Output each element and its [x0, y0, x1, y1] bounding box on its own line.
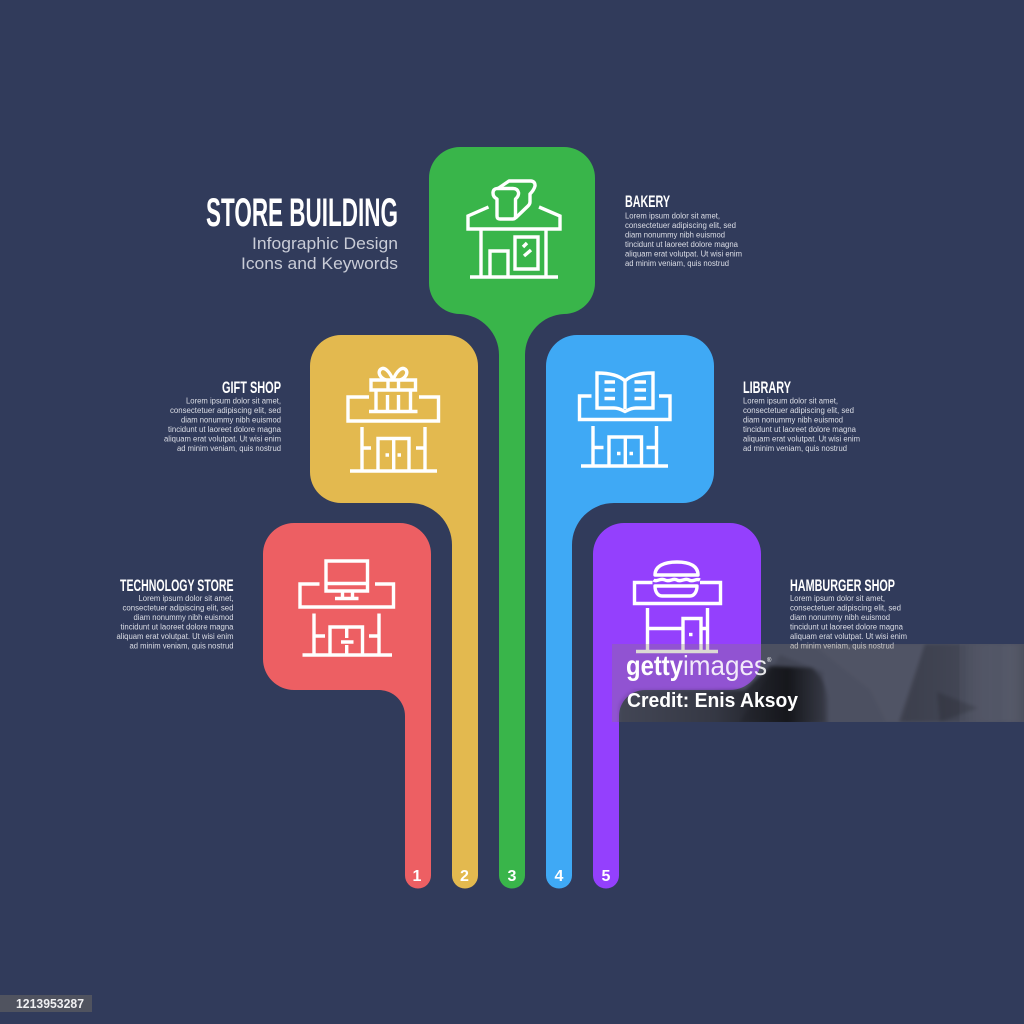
step numbers: 4 — [555, 868, 564, 885]
icon: technology store — [300, 561, 394, 655]
heading and text: technology store: Lorem ipsum dolor sit amet, — [138, 594, 234, 603]
heading and text: bakery — [625, 192, 742, 268]
icon: hamburger shop — [634, 562, 720, 652]
heading and text: hamburger shop: tincidunt ut laoreet dolore magna — [790, 622, 904, 632]
heading and text: hamburger shop: ad minim veniam, quis nostrud — [790, 642, 894, 650]
icon: bakery store — [468, 181, 560, 277]
heading and text: gift shop: consectetuer adipiscing elit, sed — [170, 406, 281, 415]
step numbers: 2 — [460, 868, 469, 885]
heading and text: bakery: BAKERY — [625, 192, 670, 211]
heading and text: bakery: Lorem ipsum dolor sit amet, — [625, 212, 720, 220]
step numbers — [413, 868, 611, 885]
heading and text: library: consectetuer adipiscing elit, sed — [743, 406, 854, 415]
step numbers: 1 — [413, 868, 422, 885]
watermark banner: Credit: Enis Aksoy — [627, 690, 799, 712]
heading and text: library: LIBRARY — [743, 378, 791, 397]
title: STORE BUILDING — [206, 191, 398, 235]
heading and text: hamburger shop — [790, 576, 907, 650]
panel: green bakery — [429, 147, 595, 888]
image id tag — [0, 995, 92, 1012]
heading and text: library: ad minim veniam, quis nostrud — [743, 444, 847, 453]
heading and text: hamburger shop: aliquam erat volutpat. Ut wisi enim — [790, 632, 907, 641]
heading and text: technology store: aliquam erat volutpat. Ut wisi enim — [116, 632, 234, 641]
heading and text: technology store: ad minim veniam, quis nostrud — [130, 642, 234, 650]
heading and text: bakery: ad minim veniam, quis nostrud — [625, 259, 729, 268]
title — [206, 191, 398, 273]
panel: blue library — [546, 335, 714, 888]
title: Infographic Design — [252, 234, 398, 253]
panel: yellow gift shop — [310, 335, 478, 888]
watermark banner: getty — [626, 650, 683, 681]
heading and text: gift shop: GIFT SHOP — [222, 378, 281, 397]
heading and text: gift shop: tincidunt ut laoreet dolore magna — [168, 425, 282, 434]
heading and text: hamburger shop: HAMBURGER SHOP — [790, 576, 895, 595]
heading and text: gift shop — [164, 378, 282, 453]
image id tag: 1213953287 — [16, 997, 84, 1011]
heading and text: bakery: diam nonummy nibh euismod — [625, 230, 725, 240]
heading and text: technology store: consectetuer adipiscing elit, sed — [122, 604, 234, 612]
watermark banner: ® — [767, 657, 772, 664]
heading and text: bakery: tincidunt ut laoreet dolore magna — [625, 240, 739, 249]
heading and text: technology store — [116, 576, 234, 650]
watermark banner — [612, 644, 1024, 730]
heading and text: bakery: consectetuer adipiscing elit, sed — [625, 221, 736, 230]
icon: gift shop — [348, 368, 438, 471]
heading and text: gift shop: aliquam erat volutpat. Ut wisi enim — [164, 434, 281, 444]
heading and text: hamburger shop: consectetuer adipiscing elit, sed — [790, 604, 901, 612]
heading and text: library: diam nonummy nibh euismod — [743, 416, 843, 424]
heading and text: library: Lorem ipsum dolor sit amet, — [743, 396, 838, 406]
heading and text: gift shop: Lorem ipsum dolor sit amet, — [186, 396, 281, 406]
heading and text: hamburger shop: Lorem ipsum dolor sit amet, — [790, 594, 885, 603]
heading and text: gift shop: diam nonummy nibh euismod — [181, 416, 281, 424]
heading and text: gift shop: ad minim veniam, quis nostrud — [177, 444, 281, 453]
panel: purple hamburger shop — [593, 523, 761, 888]
watermark banner: images — [683, 650, 767, 681]
title: Icons and Keywords — [241, 254, 398, 273]
heading and text: technology store: tincidunt ut laoreet dolore magna — [120, 622, 234, 632]
heading and text: hamburger shop: diam nonummy nibh euismod — [790, 613, 890, 622]
heading and text: library — [743, 378, 860, 453]
heading and text: technology store: diam nonummy nibh euismod — [134, 613, 234, 622]
icon: library — [580, 373, 670, 466]
heading and text: bakery: aliquam erat volutpat. Ut wisi enim — [625, 250, 742, 258]
step numbers: 5 — [602, 868, 611, 885]
heading and text: library: tincidunt ut laoreet dolore magna — [743, 425, 857, 434]
heading and text: library: aliquam erat volutpat. Ut wisi enim — [743, 434, 860, 444]
panel: red technology store — [263, 523, 431, 888]
heading and text: technology store: TECHNOLOGY STORE — [120, 576, 234, 595]
step numbers: 3 — [508, 868, 517, 885]
